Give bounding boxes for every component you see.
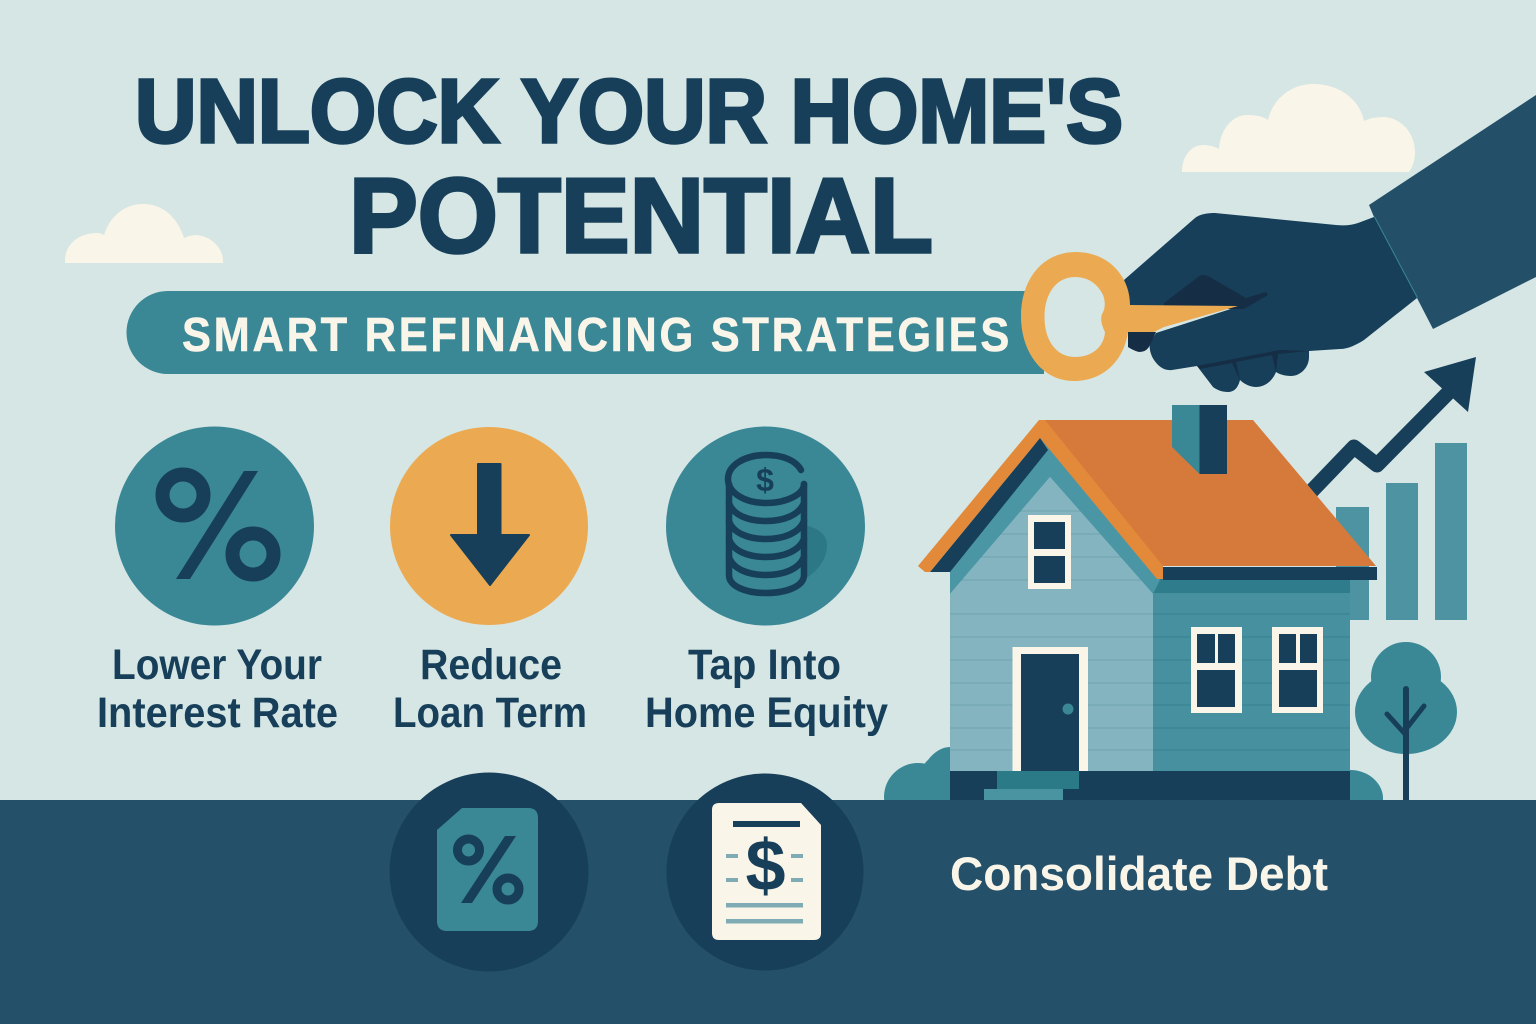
cuff line (1374, 217, 1417, 298)
light roof edge (918, 420, 1163, 579)
ground band (0, 800, 1536, 1024)
title: POTENTIAL (349, 157, 933, 275)
icon: tree (1355, 642, 1457, 800)
left siding (950, 511, 1153, 750)
icon: debt document circle: $ (745, 826, 786, 906)
dark lower finger (1128, 332, 1156, 352)
item: reduce loan term (390, 427, 588, 737)
finger crease (1197, 350, 1309, 380)
icon: bush right (1350, 770, 1383, 800)
gable window (1028, 515, 1071, 589)
label: Loan Term (393, 689, 587, 737)
icon: coin stack circle (666, 426, 865, 626)
icon: house (918, 405, 1377, 801)
label (645, 641, 888, 737)
door (1012, 647, 1088, 771)
left wall (950, 477, 1153, 771)
subtitle banner (126, 291, 1044, 374)
icon: percent tag circle (390, 772, 588, 972)
label: Home Equity (645, 689, 888, 737)
bars (1336, 507, 1369, 620)
title: UNLOCK YOUR HOME'S (135, 62, 1123, 162)
sleeve (1369, 95, 1536, 329)
label: Interest Rate (97, 689, 338, 737)
subtitle banner: SMART REFINANCING STRATEGIES (182, 309, 1012, 362)
item: tap into home equity (645, 426, 888, 737)
dark gable strip (930, 438, 1048, 572)
icon: percent circle (115, 426, 314, 626)
gable trim (950, 436, 1160, 594)
right wall (1153, 579, 1350, 771)
right siding (1153, 614, 1350, 750)
label: consolidate debt: Consolidate Debt (950, 847, 1328, 900)
hand (1124, 213, 1417, 392)
steps (984, 771, 1079, 801)
icon: debt document circle (666, 774, 864, 970)
key (1021, 252, 1238, 381)
dark thumb shadow (1164, 275, 1268, 309)
eave shadow (1153, 579, 1350, 593)
icon: down arrow circle (390, 427, 588, 625)
icon: bush left (884, 747, 952, 831)
window left (1191, 627, 1242, 713)
eave (1163, 567, 1377, 580)
label: Reduce (420, 641, 562, 689)
icon: cloud right (1182, 84, 1415, 172)
label (97, 641, 338, 737)
window right (1272, 627, 1323, 713)
chimney (1172, 405, 1200, 474)
foundation (950, 771, 1350, 801)
growth arrow (1305, 393, 1448, 498)
icon: coin stack circle: $ (756, 462, 774, 498)
label: Tap Into (688, 641, 841, 689)
icon: cloud left (65, 204, 223, 263)
main roof (1039, 420, 1376, 579)
icon: hand holding key (1021, 95, 1536, 392)
title (135, 62, 1123, 275)
chart: rising arrow and bars (1305, 357, 1476, 620)
item: lower your interest rate (97, 426, 338, 737)
label (393, 641, 587, 737)
label: Lower Your (112, 641, 322, 689)
